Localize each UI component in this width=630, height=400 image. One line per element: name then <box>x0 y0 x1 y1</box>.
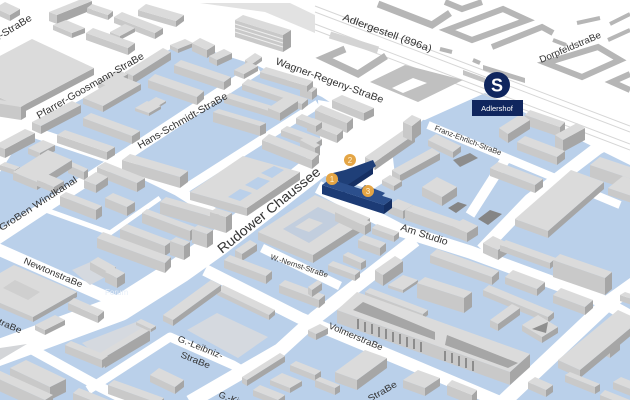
street labels: Am Studio <box>399 222 450 248</box>
buildings: south of Am Studio <box>375 249 630 343</box>
buildings: south edge cluster <box>242 324 477 400</box>
street labels: DorpfeldstraBe <box>538 30 603 66</box>
buildings: north-west cluster <box>0 0 184 120</box>
street labels: Franz-Ehrlich-StraBe <box>433 123 503 157</box>
buildings: Am Studio rows <box>388 199 612 295</box>
Forum building <box>90 257 125 288</box>
buildings: north of Franz-Ehrlich-Strasse and target surroundings <box>365 115 502 225</box>
numbered markers: 1 <box>330 175 335 184</box>
railway and north footprints <box>200 2 630 150</box>
buildings: west block near Grossen Windkanal <box>0 129 145 220</box>
buildings: south of Rudower Chaussee <box>224 195 399 308</box>
S-Bahn station marker <box>472 72 523 116</box>
buildings: rows west of Rudower Chaussee <box>97 197 232 273</box>
street labels: StraBe <box>179 350 212 370</box>
numbered markers: 3 <box>366 187 371 196</box>
numbered markers <box>326 154 374 197</box>
street labels: Adlergestell (896a) <box>341 12 433 55</box>
courtyard building north of Rudower Chaussee <box>190 156 300 216</box>
street labels: Wagner-Regeny-StraBe <box>274 56 385 106</box>
buildings: south-east corner <box>528 310 630 400</box>
street labels: Pfarrer-Goosmann-StraBe <box>35 51 147 122</box>
street labels: VolmerstraBe <box>327 321 385 353</box>
street labels: Forum <box>105 288 128 297</box>
buildings: block between Pfarrer-Goosmann and Hans-Schmidt <box>32 38 262 160</box>
buildings: Newtonstrasse block <box>0 265 104 335</box>
street labels: Rudower Chaussee <box>214 164 323 256</box>
numbered markers: 2 <box>348 156 353 165</box>
office block with stripes <box>235 15 291 52</box>
S-Bahn station marker: Adlershof <box>481 104 514 113</box>
buildings: L-shaped block at G.-Leibniz-Strasse <box>163 280 275 326</box>
street labels: Hans-Schmidt-StraBe <box>136 91 230 152</box>
street labels: G.-Leibniz- <box>176 334 225 361</box>
highlighted target building <box>322 160 392 214</box>
large institute complex at Volmerstrasse <box>337 288 530 385</box>
S-Bahn station marker: S <box>491 76 503 96</box>
buildings: south-west cluster <box>0 319 184 400</box>
street labels: NewtonstraBe <box>22 256 84 289</box>
buildings: east cluster near station <box>490 110 630 238</box>
street labels: W.-Nernst-StraBe <box>269 252 329 279</box>
buildings: Wagner-Regeny block <box>122 67 374 188</box>
